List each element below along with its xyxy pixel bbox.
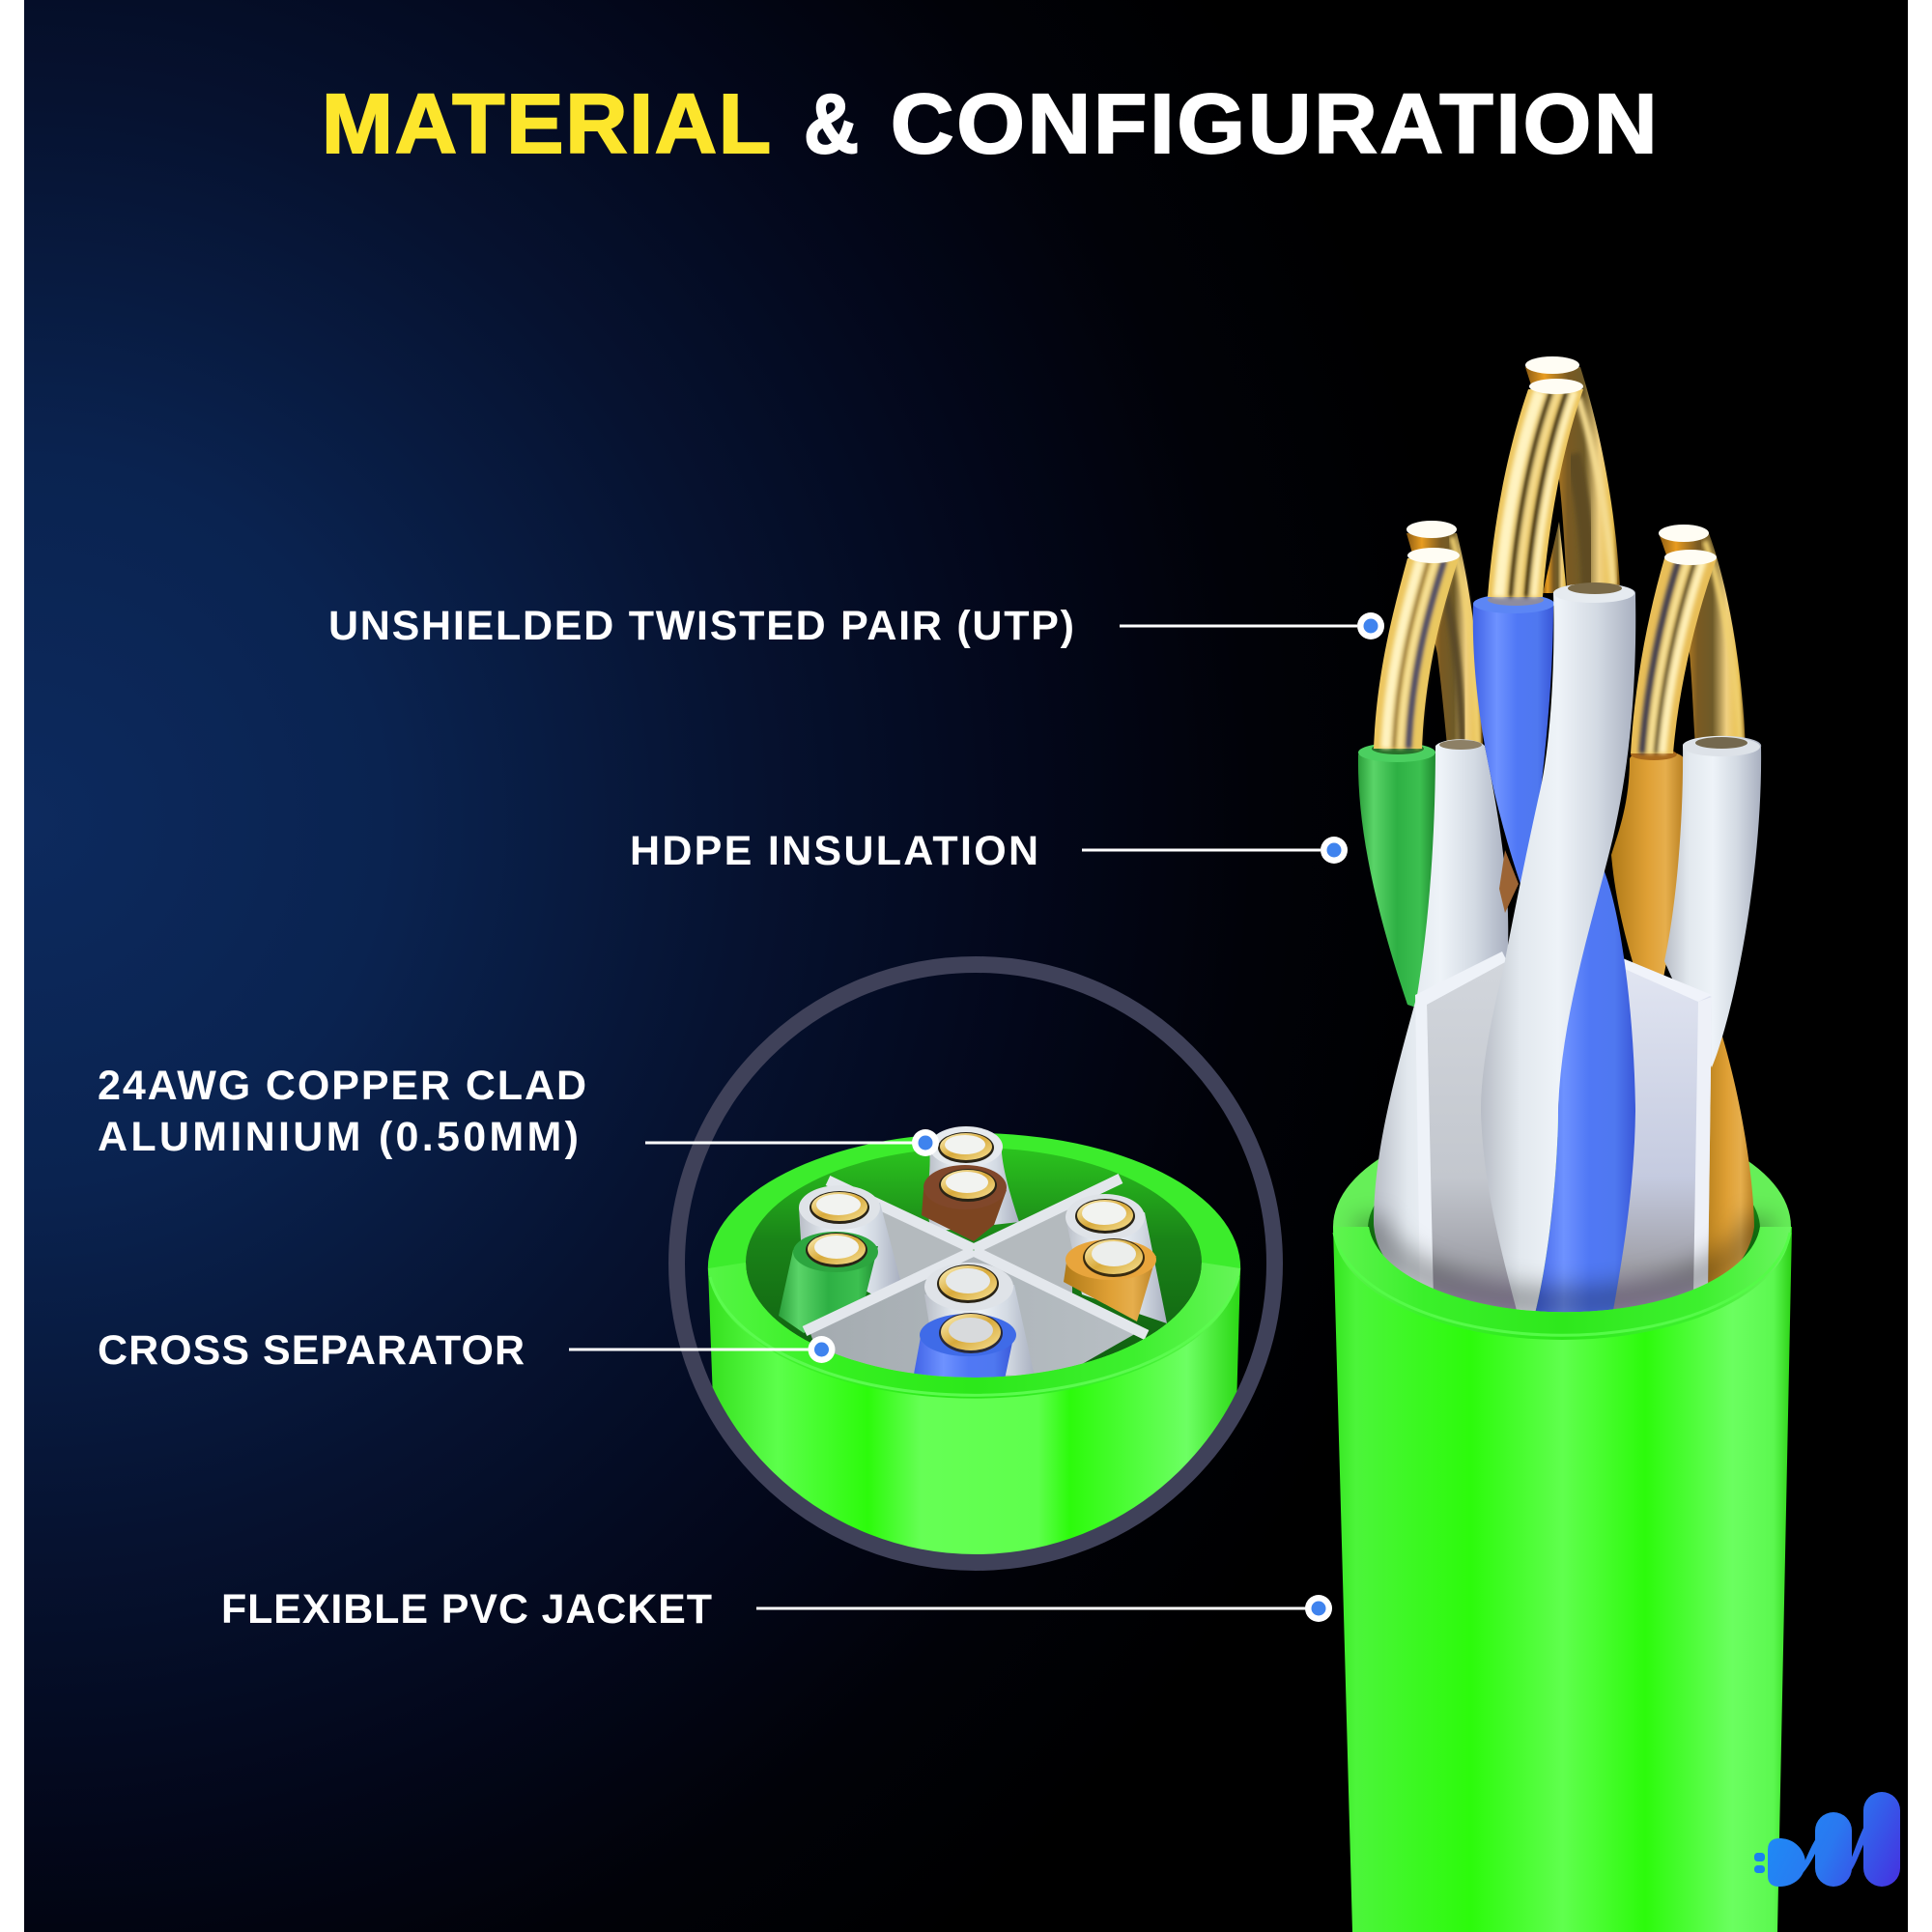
title: CONFIGURATION (891, 77, 1658, 171)
label: HDPE insulation (630, 828, 1348, 874)
title: & (804, 77, 859, 171)
label: flexible PVC jacket: FLEXIBLE PVC JACKET (221, 1586, 712, 1633)
blue insulated wire, upper section (1473, 594, 1554, 887)
cross separator, right blade (1604, 956, 1712, 1321)
inset orange wire (1064, 1238, 1156, 1321)
title: MATERIAL (322, 76, 771, 171)
label: flexible PVC jacket (221, 1586, 1332, 1633)
orange wire lower section (1700, 1037, 1754, 1299)
cross separator, back arms (828, 1179, 1121, 1304)
label: copper clad aluminium (98, 1063, 939, 1160)
inset white wire, back top (927, 1126, 1019, 1232)
green PVC jacket body (1333, 1227, 1792, 1932)
inset brown wire (922, 1165, 1007, 1241)
inset jacket rim, back (707, 1133, 1240, 1364)
cross separator, left blade (1415, 952, 1536, 1321)
back copper conductors (1406, 356, 1746, 747)
inset white wire, left back (799, 1185, 900, 1294)
inset white wire, right back (1065, 1194, 1167, 1323)
main cable illustration (1333, 356, 1792, 1932)
inset jacket body (708, 1263, 1240, 1584)
inset blue wire (913, 1313, 1016, 1379)
jacket back rim (1333, 1114, 1791, 1340)
magnifier ring (676, 964, 1275, 1563)
icon: brand plug logo (1754, 1792, 1900, 1887)
cross separator, front arms (805, 1251, 1147, 1391)
white insulated wire, left pair (1374, 739, 1508, 1294)
orange insulated wire (1611, 749, 1684, 978)
inset cross-section detail (676, 964, 1275, 1584)
label: cross separator (98, 1327, 835, 1374)
title (322, 76, 1658, 171)
label: cross separator: CROSS SEPARATOR (98, 1327, 525, 1374)
label: copper clad aluminium: 24AWG COPPER CLAD (98, 1063, 586, 1109)
white insulated wire, front twist (1481, 582, 1635, 1321)
blue insulated wire, lower section (1533, 869, 1635, 1321)
label: unshielded twisted pair: UNSHIELDED TWISTED PAIR (UTP) (328, 603, 1074, 649)
inset white wire, front (924, 1263, 1035, 1377)
white insulated wire, right pair (1664, 736, 1761, 1067)
inner shadow at jacket opening (1369, 1217, 1760, 1302)
hidden strands between pairs (1499, 850, 1519, 913)
label: HDPE insulation: HDPE INSULATION (630, 828, 1038, 874)
green insulated wire (1358, 743, 1435, 1009)
inset green wire (779, 1232, 878, 1333)
copper conductor, right pair (1631, 550, 1717, 753)
copper conductor, centre pair (1488, 379, 1583, 597)
copper conductor, left pair (1374, 548, 1460, 749)
label: copper clad aluminium: ALUMINIUM (0.50MM) (98, 1114, 579, 1160)
